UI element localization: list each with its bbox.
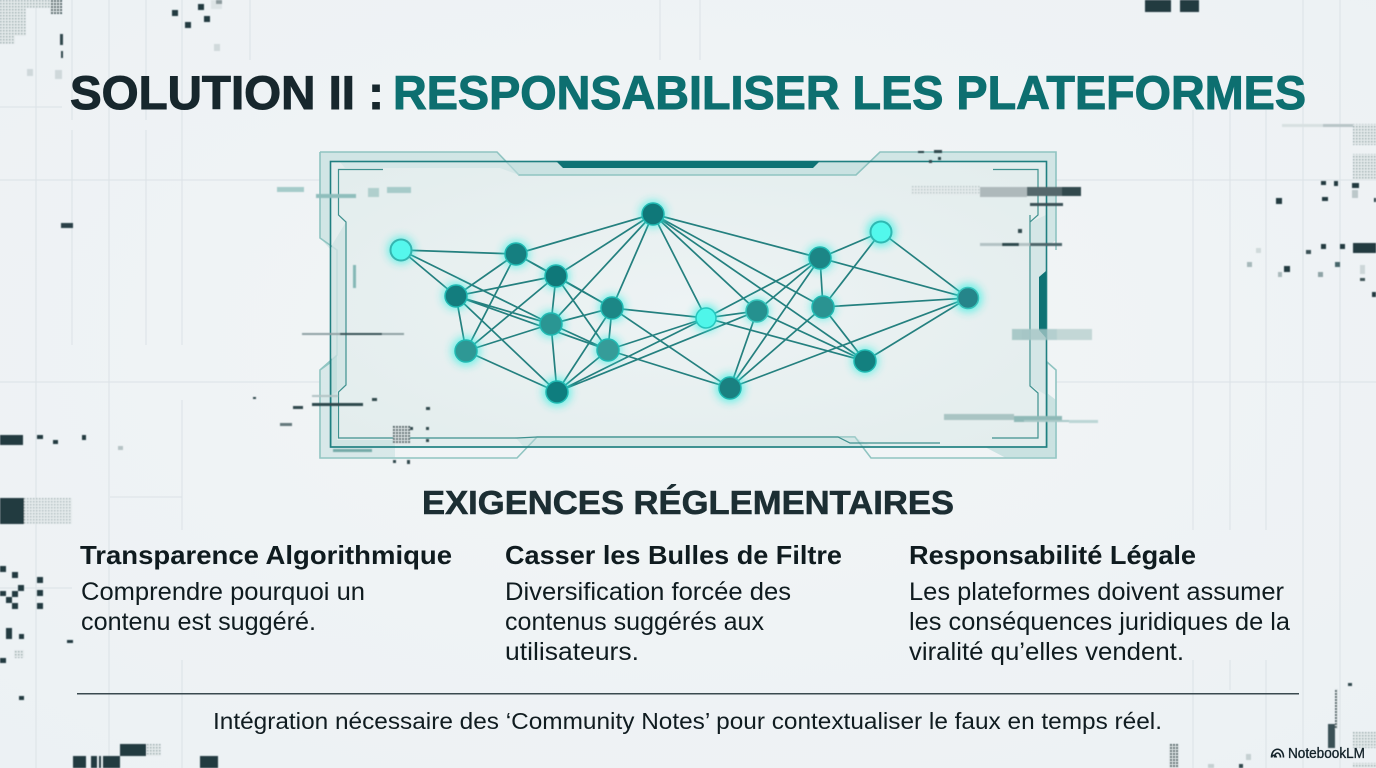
decoration: right pixel noise	[1247, 124, 1376, 297]
logo: NotebookLM: NotebookLM	[1288, 746, 1365, 762]
column: responsabilité: Responsabilité Légale	[909, 540, 1196, 570]
network edges	[401, 214, 968, 392]
decoration: top-left pixel noise	[0, 0, 222, 228]
column: transparence: Comprendre pourquoi un	[81, 578, 365, 606]
column: transparence: contenu est suggéré.	[81, 608, 316, 636]
column: bulles de filtre	[505, 540, 842, 666]
network nodes	[390, 203, 978, 403]
column: responsabilité: les conséquences juridiques de la	[909, 608, 1290, 636]
column: transparence: Transparence Algorithmique	[80, 540, 452, 570]
panel: network frame	[320, 152, 1056, 458]
column: bulles de filtre: Diversification forcée des	[505, 578, 791, 606]
network node glows	[388, 201, 982, 406]
column: responsabilité: viralité qu’elles vendent.	[909, 638, 1184, 666]
title: SOLUTION II :	[70, 66, 384, 119]
decoration: bottom-right noise	[1169, 683, 1376, 768]
column: bulles de filtre: Casser les Bulles de Filtre	[505, 540, 842, 570]
footer note: Intégration nécessaire des ‘Community Notes’ pour contextualiser le faux en temps réel.	[213, 708, 1162, 734]
decoration: bottom-left blocks	[73, 744, 218, 768]
heading: exigences: EXIGENCES RÉGLEMENTAIRES	[422, 484, 954, 521]
frame glitch noise	[253, 150, 1098, 464]
right accent bar	[1039, 271, 1046, 338]
decoration: left pixel noise	[0, 435, 123, 700]
title: RESPONSABILISER LES PLATEFORMES	[393, 66, 1306, 119]
column: transparence	[80, 540, 452, 636]
column: bulles de filtre: contenus suggérés aux	[505, 608, 764, 636]
chart: network graph	[388, 201, 982, 406]
column: responsabilité: Les plateformes doivent assumer	[909, 578, 1284, 606]
decoration: top-right blocks	[1145, 0, 1199, 12]
icon: NotebookLM mark	[1272, 749, 1284, 758]
top accent bar	[556, 161, 820, 168]
column: bulles de filtre: utilisateurs.	[505, 638, 639, 666]
column: responsabilité	[909, 540, 1290, 666]
